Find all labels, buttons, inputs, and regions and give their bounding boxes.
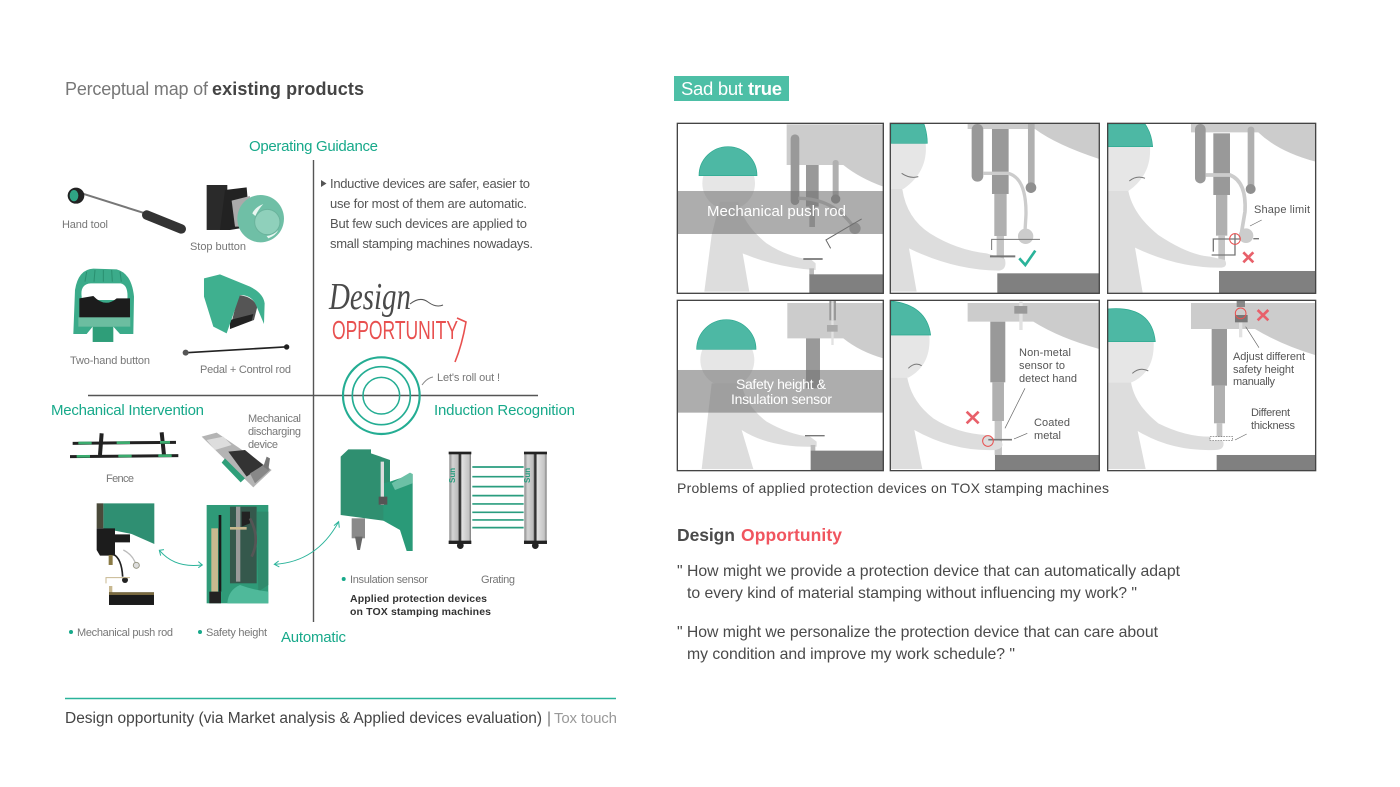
- design opportunity target circles: [343, 357, 420, 434]
- callout: let's roll out: Let's roll out !: [437, 372, 500, 384]
- title: perceptual map: existing products: [212, 79, 364, 99]
- callout: different thickness: [1251, 407, 1296, 432]
- panel title: Safety height &: [736, 376, 827, 392]
- perceptual map axes: [88, 160, 538, 622]
- panel: non-metal sensor: [890, 300, 1099, 471]
- heading: design opportunity: [677, 525, 842, 545]
- product: mechanical discharging device: [202, 433, 272, 487]
- label: grating: Grating: [481, 574, 515, 586]
- label: mechanical discharging device: [248, 413, 301, 451]
- label: pedal and control rod: Pedal + Control rod: [200, 364, 291, 376]
- caption: problems of applied devices: Problems of applied protection devices on TOX stamping machines: [677, 480, 1109, 496]
- insight text block: small stamping machines nowadays.: [330, 236, 533, 251]
- panel title: Insulation sensor: [731, 391, 832, 407]
- callout: coated metal: metal: [1034, 430, 1061, 442]
- label: mechanical discharging device: discharging: [248, 426, 301, 438]
- insight text block: [321, 176, 533, 251]
- axis label: operating guidance: Operating Guidance: [249, 138, 378, 155]
- caption: applied protection devices: [350, 593, 491, 618]
- photo: mechanical push rod: [97, 503, 154, 605]
- callout: non-metal sensor: sensor to: [1019, 360, 1065, 372]
- panel title: Mechanical push rod: [707, 203, 846, 220]
- callout: adjust safety height: Adjust different: [1233, 351, 1305, 363]
- question one: " How might we provide a protection device that can automatically adapt: [677, 563, 1181, 580]
- footer rule: [65, 698, 616, 700]
- heading badge: sad but true: true: [748, 78, 782, 99]
- product: fence: [70, 432, 178, 457]
- caption: applied protection devices: Applied protection devices: [350, 593, 487, 605]
- photo: grating light curtain: [449, 452, 547, 549]
- footer caption: Design opportunity (via Market analysis & Applied devices evaluation): [65, 710, 542, 727]
- panel title: [731, 376, 832, 407]
- caption: applied protection devices: on TOX stamping machines: [350, 606, 491, 618]
- question two: " How might we personalize the protection device that can care about: [677, 624, 1159, 641]
- axis label: automatic: Automatic: [281, 629, 346, 646]
- callout: adjust safety height: [1233, 351, 1305, 388]
- label: hand tool: Hand tool: [62, 219, 108, 231]
- callout: non-metal sensor: [1019, 347, 1077, 385]
- product: hand tool: [68, 188, 181, 229]
- axis label: mechanical intervention: Mechanical Intervention: [51, 402, 204, 419]
- footer caption: Tox touch: [554, 710, 617, 727]
- photo: insulation sensor: [341, 449, 413, 551]
- panel: safety height and insulation sensor intro: [677, 300, 883, 471]
- question two: [677, 624, 1159, 663]
- label: fence: Fence: [106, 473, 134, 485]
- callout: non-metal sensor: Non-metal: [1019, 347, 1071, 359]
- panel: push rod works: [890, 123, 1099, 293]
- photo: safety height: [207, 505, 268, 603]
- label: mechanical push rod: Mechanical push rod: [77, 627, 173, 639]
- label: two-hand button: Two-hand button: [70, 355, 150, 367]
- heading badge: sad but true: [674, 76, 789, 101]
- callout: different thickness: Different: [1251, 407, 1290, 419]
- question one: [677, 563, 1181, 602]
- panel: mechanical push rod intro: [677, 123, 883, 293]
- product: pedal and control rod: [183, 274, 289, 356]
- label: mechanical discharging device: Mechanical: [248, 413, 301, 425]
- label: safety height: Safety height: [206, 627, 267, 639]
- arrows between applied devices: [159, 522, 339, 568]
- handwritten design opportunity: [328, 276, 466, 362]
- callout: coated metal: Coated: [1034, 417, 1070, 429]
- callout: non-metal sensor: detect hand: [1019, 373, 1077, 385]
- title: perceptual map: Perceptual map of: [65, 79, 209, 99]
- heading: design opportunity: Opportunity: [741, 525, 842, 545]
- product: two-hand button: [73, 269, 134, 342]
- question two: my condition and improve my work schedule? ": [687, 646, 1015, 663]
- handwritten design opportunity: OPPORTUNITY: [332, 315, 458, 345]
- handwritten design opportunity: Design: [328, 276, 411, 318]
- grating brand marks: Sun: [448, 468, 457, 483]
- product: stop button: [207, 185, 284, 242]
- heading: design opportunity: Design: [677, 525, 735, 545]
- title: perceptual map: [65, 79, 364, 99]
- insight text block: use for most of them are automatic.: [330, 196, 527, 211]
- label: mechanical discharging device: device: [248, 439, 278, 451]
- grating brand marks: Sun: [523, 468, 532, 483]
- insight text block: Inductive devices are safer, easier to: [330, 176, 530, 191]
- label: insulation sensor: Insulation sensor: [350, 574, 428, 586]
- panel: adjust safety height: [1108, 300, 1316, 471]
- heading badge: sad but true: Sad but: [681, 78, 743, 99]
- grating brand marks: [448, 468, 532, 483]
- callout: adjust safety height: safety height: [1233, 364, 1294, 376]
- question one: to every kind of material stamping without influencing my work? ": [687, 585, 1137, 602]
- footer caption: |: [547, 710, 551, 727]
- callout: adjust safety height: manually: [1233, 376, 1276, 388]
- callout: coated metal: [1034, 417, 1070, 442]
- panel: shape limit: [1108, 123, 1316, 293]
- callout: different thickness: thickness: [1251, 420, 1296, 432]
- callout: shape limit: Shape limit: [1254, 204, 1310, 216]
- axis label: induction recognition: Induction Recognition: [434, 402, 575, 419]
- insight text block: But few such devices are applied to: [330, 216, 527, 231]
- label: stop button: Stop button: [190, 241, 246, 253]
